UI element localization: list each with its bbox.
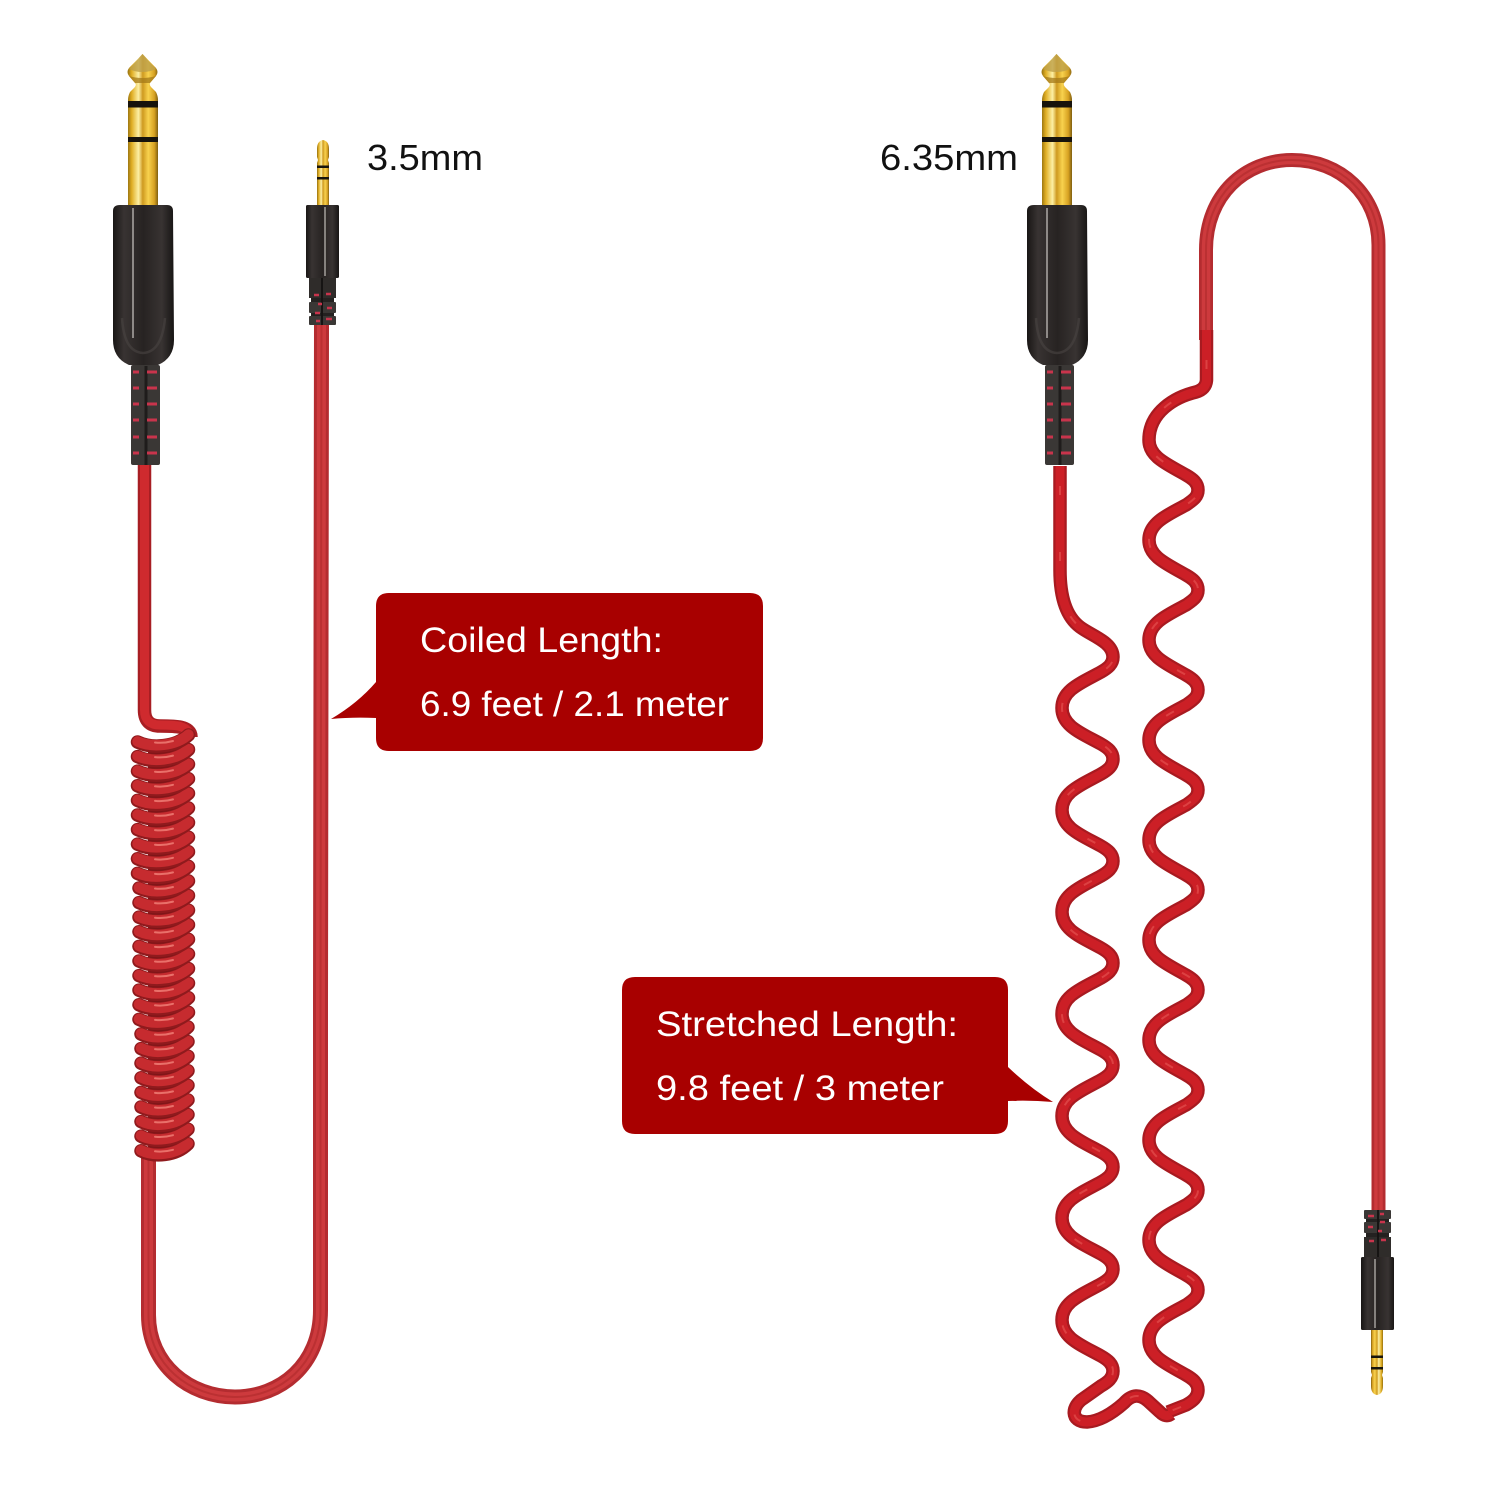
stretched coil: left strand: [1060, 466, 1171, 1422]
right 3.5mm plug: [1361, 1210, 1394, 1395]
callout value: 6.9 feet / 2.1 meter: [420, 685, 729, 724]
callout heading: Coiled Length:: [420, 621, 663, 660]
callout: stretched length: [622, 977, 1053, 1134]
label: 6.35mm: 6.35mm: [880, 137, 1018, 178]
right cable: stretched length: [1060, 160, 1378, 1422]
callout: coiled length: [331, 593, 763, 751]
compressed coil: [138, 734, 188, 1155]
left 6.35mm plug: [113, 54, 174, 465]
stretched coil: right strand: [1149, 330, 1206, 1412]
callout heading: Stretched Length:: [656, 1005, 958, 1044]
long u-shaped cable to 3.5mm plug: [148, 325, 322, 1397]
left cable: coiled length: [138, 325, 322, 1397]
cable from 6.35mm plug into coil: [144, 465, 191, 737]
left 3.5mm plug: [306, 140, 339, 325]
label: 3.5mm: 3.5mm: [367, 137, 483, 178]
callout value: 9.8 feet / 3 meter: [656, 1069, 944, 1108]
right 6.35mm plug: [1027, 54, 1088, 465]
arched cable to 3.5mm plug: [1206, 160, 1378, 1212]
